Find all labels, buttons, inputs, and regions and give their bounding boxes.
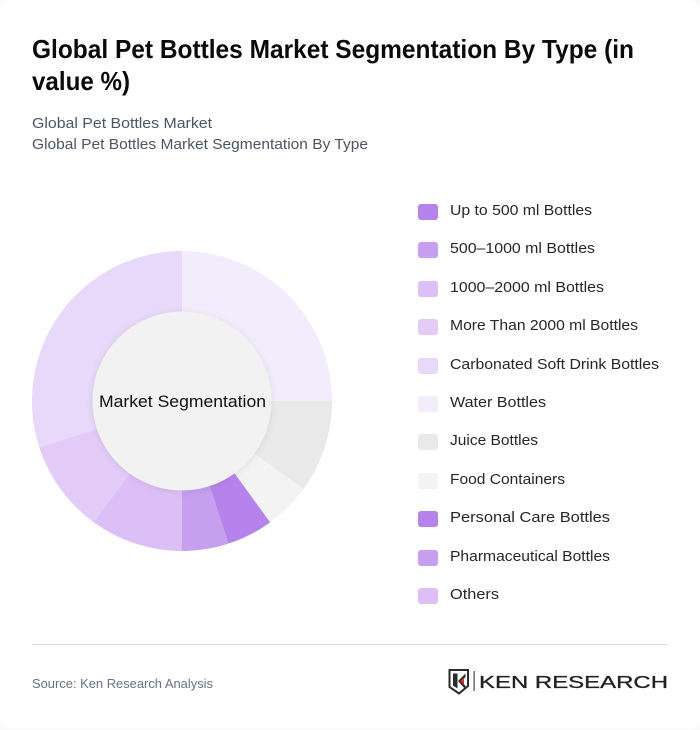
legend item: Others (418, 586, 499, 604)
source note: Source: Ken Research Analysis (32, 676, 213, 691)
legend item: Juice Bottles: Juice Bottles (450, 432, 538, 449)
legend item: Water Bottles (418, 394, 546, 412)
donut chart (32, 251, 332, 551)
title (32, 34, 634, 96)
legend item: 1000–2000 ml Bottles: 1000–2000 ml Bottles (450, 279, 604, 296)
slice: Pharmaceutical Bottles (182, 401, 228, 551)
legend item: Personal Care Bottles: Personal Care Bottles (450, 509, 610, 526)
slice: Juice Bottles (182, 401, 332, 489)
slice: Carbonated Soft Drink Bottles (32, 251, 182, 447)
title: value %) (32, 66, 130, 96)
legend item: Pharmaceutical Bottles: Pharmaceutical Bottles (450, 548, 610, 565)
subtitle: Global Pet Bottles Market (32, 115, 213, 132)
legend item: Food Containers: Food Containers (450, 471, 565, 488)
logo: Ken Research (450, 670, 668, 694)
slice: Water Bottles (182, 251, 332, 401)
legend item: Juice Bottles (418, 432, 538, 450)
legend item: Up to 500 ml Bottles: Up to 500 ml Bottles (450, 202, 592, 219)
icon: shield mark (450, 670, 468, 694)
legend (418, 202, 659, 604)
slice: Personal Care Bottles (182, 401, 270, 544)
slice: More Than 2000 ml Bottles (39, 401, 182, 522)
legend item: 500–1000 ml Bottles: 500–1000 ml Bottles (450, 240, 595, 257)
legend item: Others: Others (450, 586, 499, 603)
subtitle (32, 115, 368, 153)
title: Global Pet Bottles Market Segmentation By Type (in (32, 34, 634, 64)
legend item: Water Bottles: Water Bottles (450, 394, 546, 411)
logo wordmark: KEN RESEARCH (479, 672, 668, 692)
centre label: Market Segmentation (99, 392, 266, 411)
donut centre (92, 312, 272, 490)
legend item: More Than 2000 ml Bottles: More Than 2000 ml Bottles (450, 317, 638, 334)
subtitle: Global Pet Bottles Market Segmentation By Type (32, 136, 368, 153)
slice: Food Containers (182, 401, 303, 522)
legend item: Carbonated Soft Drink Bottles: Carbonated Soft Drink Bottles (450, 356, 659, 373)
slice: Others (94, 401, 182, 551)
